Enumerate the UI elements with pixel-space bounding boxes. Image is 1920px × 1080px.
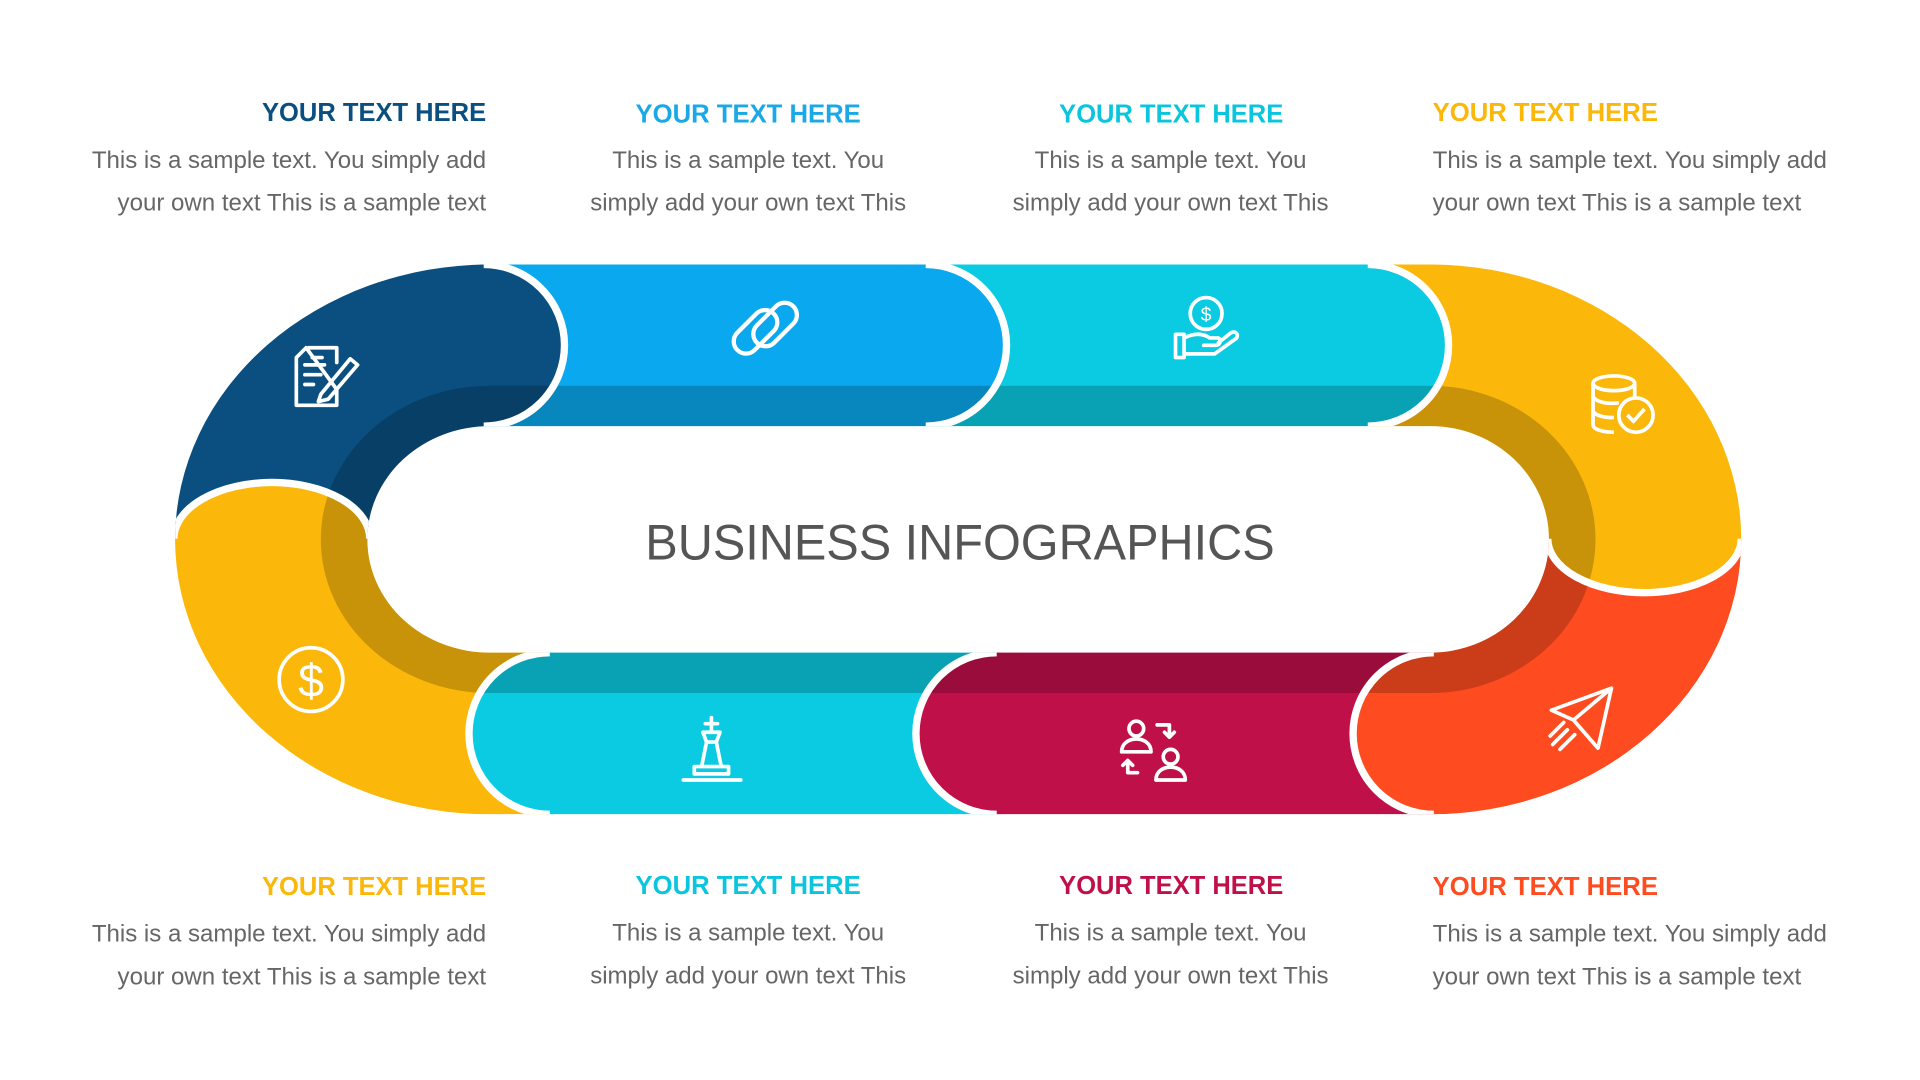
text block: top 4: This is a sample text. You simply add [1433,147,1827,174]
text block: bottom 3: simply add your own text This [1013,962,1329,989]
segment: yellow left [175,538,550,814]
chain ring [175,264,1742,814]
inner shade stripe [321,386,1596,693]
center title: BUSINESS INFOGRAPHICS [645,515,1275,571]
icon: dollar circle: $ [298,655,324,707]
text block: top 3 [1013,100,1329,217]
segment: orange [1434,538,1742,814]
text block: bottom 3: YOUR TEXT HERE [1059,872,1283,900]
text block: bottom 4: YOUR TEXT HERE [1433,873,1658,901]
text block: bottom 2 [590,872,906,989]
text block: bottom 2: This is a sample text. You [612,919,884,946]
text block: top 4: YOUR TEXT HERE [1433,99,1658,127]
icon: chain link [729,298,802,359]
segment: cyan bottom [550,652,997,814]
text block: bottom 1: your own text This is a sample text [118,963,486,990]
icon: dollar circle [279,648,343,711]
text block: top 2: simply add your own text This [590,190,906,217]
icon: chess king [683,718,741,780]
text block: top 4: your own text This is a sample text [1433,190,1802,217]
text block: bottom 3 [1013,872,1329,989]
text block: top 2 [590,100,906,217]
caps [174,264,1741,814]
text block: bottom 1 [92,873,486,990]
text block: top 3: simply add your own text This [1013,190,1329,217]
text block: top 3: YOUR TEXT HERE [1059,100,1283,128]
segment: cyan top [926,264,1368,426]
text block: top 1: YOUR TEXT HERE [262,99,486,127]
icon: paper plane [1550,688,1611,749]
text block: bottom 1: This is a sample text. You simply add [92,921,486,948]
icon: hand with dollar coin [1176,298,1237,358]
icon: people swap [1122,721,1185,780]
text block: bottom 4 [1433,873,1827,990]
text block: bottom 4: your own text This is a sample text [1433,963,1802,990]
segment: light blue [484,264,926,426]
icon: database check [1593,376,1653,432]
text block: top 2: This is a sample text. You [612,147,884,174]
text block: top 4 [1433,99,1827,217]
segment: dark blue [175,264,484,539]
cap outlines [174,264,1741,814]
text block: top 2: YOUR TEXT HERE [636,100,861,128]
segment: crimson [996,652,1434,814]
text block: top 1 [92,99,486,217]
text block: top 3: This is a sample text. You [1035,147,1307,174]
text block: bottom 2: simply add your own text This [590,962,906,989]
text block: bottom 1: YOUR TEXT HERE [262,873,486,901]
text block: bottom 2: YOUR TEXT HERE [636,872,861,900]
text block: bottom 3: This is a sample text. You [1035,919,1307,946]
segment: yellow right [1368,264,1742,539]
text block: top 1: This is a sample text. You simply add [92,147,486,174]
icon: hand with dollar coin: $ [1201,304,1212,326]
text block: bottom 4: This is a sample text. You simply add [1433,921,1827,948]
text block: top 1: your own text This is a sample text [118,190,486,217]
icon: document with pencil [296,348,358,405]
